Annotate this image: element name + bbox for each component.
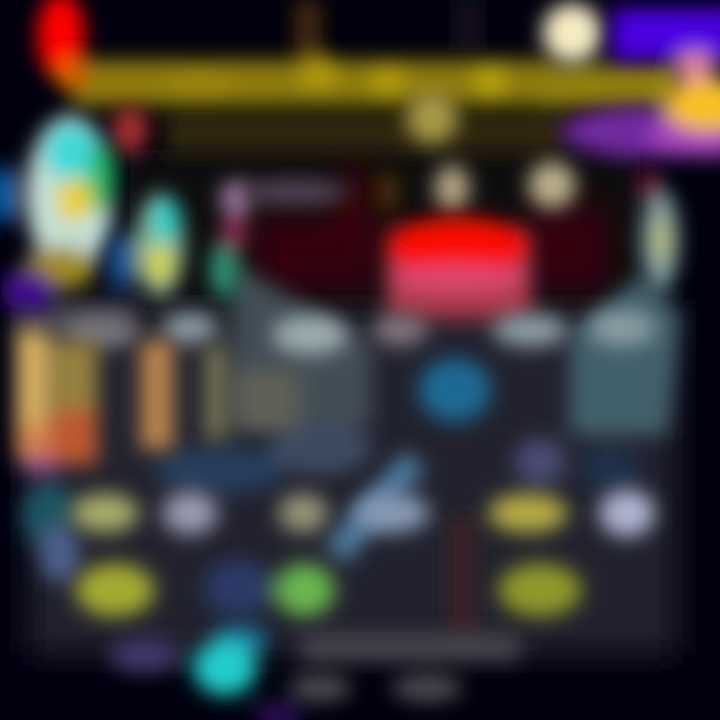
bar chart: orange bars xyxy=(16,330,298,476)
header band behind subtitle xyxy=(165,0,565,154)
title xyxy=(72,54,680,108)
icon: blue circle xyxy=(419,358,491,422)
icon: moon xyxy=(542,3,602,63)
stat labels row xyxy=(71,489,655,537)
red hero panel xyxy=(386,217,532,320)
illustration: top-right planet xyxy=(560,8,720,158)
dark red divider xyxy=(450,515,476,640)
cream figures xyxy=(379,161,576,212)
heading text block xyxy=(241,179,349,205)
column headers xyxy=(62,310,656,355)
diagonal streak xyxy=(335,460,415,555)
panel: dark red stage backdrop xyxy=(255,165,610,290)
icon: small rocket and pink marker xyxy=(210,180,252,298)
subtitle blob xyxy=(406,92,458,144)
icon: right rocket xyxy=(639,170,679,292)
icon: medium rocket xyxy=(108,193,184,297)
icon: large rocket xyxy=(0,115,116,310)
stat value badges xyxy=(75,560,582,617)
panel: main dark background xyxy=(28,150,678,655)
icon: red balloon xyxy=(37,0,148,154)
footer xyxy=(109,626,520,720)
illustration: mid grey-blue scene xyxy=(15,262,680,583)
